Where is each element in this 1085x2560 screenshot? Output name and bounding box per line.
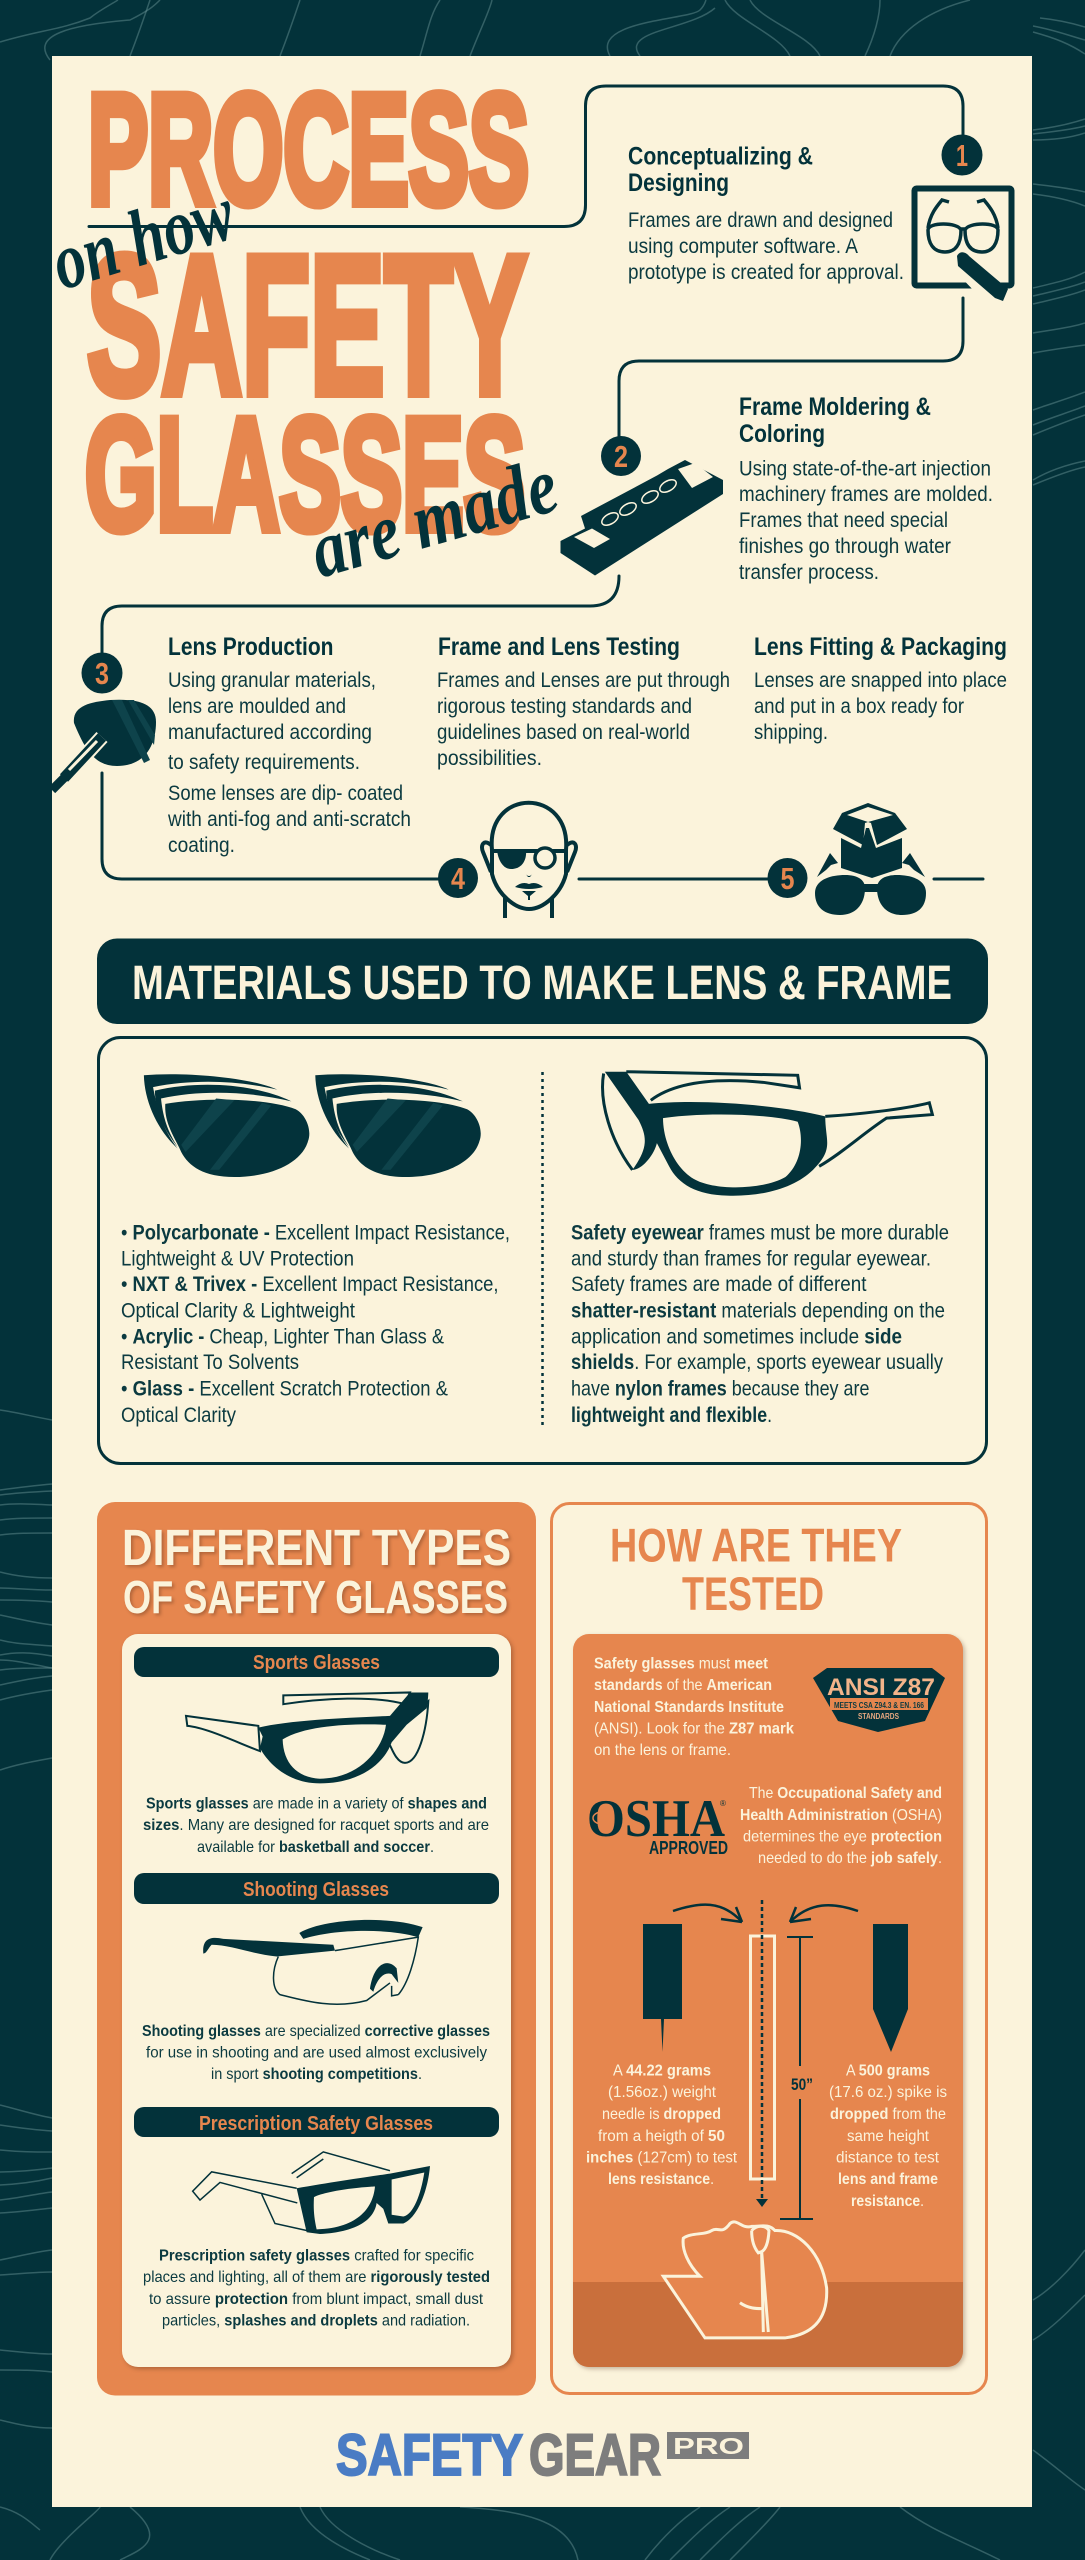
step 1 number — [942, 134, 982, 176]
logo: safety gear pro: GEAR — [529, 2423, 661, 2488]
step 3 body: manufactured according — [168, 721, 372, 744]
panel heading: OF SAFETY GLASSES — [123, 1571, 508, 1623]
prescription glasses text: particles, splashes and droplets and radiation. — [162, 2313, 470, 2330]
script: are made: are made — [301, 441, 567, 595]
shooting glasses text: in sport shooting competitions. — [211, 2066, 422, 2083]
ANSI text: standards of the American — [594, 1677, 772, 1694]
step 2 heading — [739, 393, 931, 448]
icon: man wearing glasses — [482, 803, 576, 918]
title word: GLASSES: GLASSES — [85, 385, 525, 563]
frames description: have nylon frames because they are — [571, 1378, 870, 1401]
prescription safety glasses — [134, 2107, 499, 2330]
sports glasses: Sports Glasses — [253, 1652, 380, 1674]
step 2: frame moldering and coloring — [560, 393, 993, 584]
ANSI Z87 badge: STANDARDS — [858, 1712, 900, 1721]
frames description — [571, 1222, 949, 1427]
logo: safety gear pro: SAFETY — [336, 2423, 523, 2488]
step 5 body: shipping. — [754, 721, 828, 744]
panel: materials — [98, 1038, 986, 1464]
step 2 number: 2 — [614, 439, 628, 474]
step 5: lens fitting and packaging — [754, 633, 1007, 915]
arrow: right spike to lens — [790, 1905, 858, 1922]
materials list: • Glass - Excellent Scratch Protection & — [121, 1378, 448, 1401]
step 1 heading: Designing — [628, 169, 729, 197]
prescription glasses text: places and lighting, all of them are rigorously tested — [143, 2269, 490, 2286]
title word: PROCESS: PROCESS — [88, 63, 529, 237]
OSHA text: The Occupational Safety and — [749, 1785, 942, 1802]
materials list: Optical Clarity & Lightweight — [121, 1300, 355, 1322]
step 4 number — [438, 858, 478, 898]
OSHA text — [740, 1785, 942, 1867]
icon: sports glasses — [186, 1692, 428, 1783]
panel: different types of safety glasses — [97, 1502, 536, 2396]
step 2 heading: Frame Moldering & — [739, 393, 931, 421]
needle test text: from a heigth of 50 — [598, 2128, 725, 2145]
icon: injection molding machine — [560, 460, 723, 576]
icon: spike weight — [873, 1924, 908, 2052]
spike test text: A 500 grams — [846, 2063, 930, 2080]
icon: box and sunglasses — [815, 803, 926, 915]
step 2 body: finishes go through water — [739, 535, 951, 558]
step 2 body: Using state-of-the-art injection — [739, 458, 991, 480]
step 3 number — [82, 652, 122, 694]
frames description: application and sometimes include side — [571, 1326, 902, 1349]
OSHA text: determines the eye protection — [743, 1828, 942, 1846]
sports glasses text: available for basketball and soccer. — [197, 1839, 434, 1856]
step 5 number — [768, 858, 808, 898]
step 1 body: using computer software. A — [628, 235, 858, 258]
frames description: lightweight and flexible. — [571, 1404, 772, 1427]
step 4 heading: Frame and Lens Testing — [438, 633, 680, 661]
step 1 body — [628, 209, 904, 284]
step 5 number: 5 — [780, 861, 794, 896]
icon: safety glasses frame — [603, 1072, 932, 1196]
step 3 body: Some lenses are dip- coated — [168, 782, 403, 805]
step 4 number: 4 — [451, 861, 466, 896]
icon: glasses on drawing board with pen — [914, 188, 1012, 304]
shooting glasses text: for use in shooting and are used almost exclusively — [146, 2044, 487, 2062]
spike test text: same height — [847, 2128, 930, 2145]
materials list: Optical Clarity — [121, 1404, 236, 1427]
script: on how: on how — [42, 169, 245, 307]
step 4 body: possibilities. — [437, 747, 542, 770]
step 2 body — [739, 458, 993, 584]
ANSI text: on the lens or frame. — [594, 1742, 731, 1759]
banner: materials used to make lens and frame — [97, 938, 988, 1024]
spike test text — [829, 2063, 947, 2210]
materials list — [121, 1222, 510, 1427]
OSHA approved logo: OSHA — [587, 1790, 725, 1848]
step 1 number: 1 — [956, 138, 968, 173]
panel heading: HOW ARE THEY — [610, 1519, 902, 1572]
OSHA text: Health Administration (OSHA) — [740, 1807, 942, 1824]
ANSI text: (ANSI). Look for the Z87 mark — [594, 1720, 794, 1738]
icon: needle weight — [643, 1924, 682, 2052]
ANSI text: National Standards Institute — [594, 1699, 784, 1716]
icon: stacked lenses — [144, 1074, 481, 1177]
OSHA approved logo: ® — [720, 1799, 726, 1808]
materials list: Resistant To Solvents — [121, 1351, 299, 1374]
step 3 body — [167, 669, 411, 857]
step 2 heading: Coloring — [739, 420, 825, 448]
step 5 heading: Lens Fitting & Packaging — [754, 633, 1007, 661]
logo: safety gear pro: PRO — [673, 2433, 744, 2459]
step 2 body: Frames that need special — [739, 509, 948, 532]
height label: 50” — [791, 2075, 813, 2094]
needle test text: A 44.22 grams — [613, 2063, 711, 2080]
process connector line — [89, 86, 983, 879]
frames description: Safety frames are made of different — [571, 1273, 867, 1296]
panel heading: TESTED — [682, 1567, 824, 1620]
panel heading — [122, 1519, 511, 1623]
step 3 body: to safety requirements. — [168, 751, 360, 774]
ANSI Z87 badge: MEETS CSA Z94.3 & EN. 166 — [834, 1700, 924, 1710]
materials list: • Polycarbonate - Excellent Impact Resistance, — [121, 1222, 510, 1245]
step 2 body: transfer process. — [739, 561, 879, 584]
needle test text — [586, 2063, 738, 2188]
icon: head wearing glasses — [663, 2222, 827, 2338]
step 1 heading: Conceptualizing & — [628, 142, 813, 170]
shooting glasses — [134, 1873, 499, 2083]
needle test text: inches (127cm) to test — [586, 2150, 738, 2166]
step 1: conceptualizing and designing — [628, 134, 1012, 304]
spike test text: lens and frame — [838, 2171, 938, 2188]
sports glasses — [134, 1647, 499, 1856]
shooting glasses text — [142, 2023, 490, 2083]
icon: prescription glasses — [193, 2152, 430, 2234]
prescription glasses text — [143, 2248, 490, 2330]
frames description: shatter-resistant materials depending on the — [571, 1300, 945, 1322]
step 2 number — [601, 436, 641, 476]
step 1 body: Frames are drawn and designed — [628, 209, 893, 232]
OSHA text: needed to do the job safely. — [758, 1850, 942, 1867]
shooting glasses text: Shooting glasses are specialized corrective glasses — [142, 2023, 490, 2040]
needle test text: lens resistance. — [608, 2171, 714, 2188]
sports glasses text — [143, 1796, 489, 1856]
step 3 heading: Lens Production — [168, 633, 334, 661]
step 3 body: with anti-fog and anti-scratch — [167, 808, 411, 831]
ANSI text: Safety glasses must meet — [594, 1655, 769, 1672]
frames description: Safety eyewear frames must be more durable — [571, 1222, 949, 1245]
ANSI Z87 badge — [813, 1668, 945, 1732]
step 3 body: lens are moulded and — [168, 695, 346, 718]
materials list: • NXT & Trivex - Excellent Impact Resistance, — [121, 1273, 498, 1296]
needle test text: needle is dropped — [602, 2106, 721, 2123]
title: process on how safety glasses are made — [85, 63, 529, 563]
step 1 body: prototype is created for approval. — [628, 261, 904, 284]
spike test text: (17.6 oz.) spike is — [829, 2084, 947, 2101]
prescription safety glasses: Prescription Safety Glasses — [199, 2113, 433, 2135]
step 3 body: coating. — [168, 834, 235, 857]
icon: lens held by tongs — [52, 700, 156, 790]
panel heading: DIFFERENT TYPES — [122, 1519, 511, 1576]
prescription glasses text: Prescription safety glasses crafted for specific — [159, 2248, 474, 2264]
OSHA approved logo: APPROVED — [649, 1838, 728, 1858]
logo: safety gear pro — [336, 2423, 749, 2488]
prescription glasses text: to assure protection from blunt impact, small dust — [149, 2291, 484, 2308]
step 3 body: Using granular materials, — [168, 669, 376, 692]
icon: shooting glasses — [203, 1920, 423, 2004]
spike test text: resistance. — [851, 2193, 924, 2210]
step 5 body: and put in a box ready for — [754, 695, 964, 718]
title word: SAFETY: SAFETY — [87, 215, 527, 435]
frames description: shields. For example, sports eyewear usually — [571, 1351, 943, 1374]
step 4 body: Frames and Lenses are put through — [437, 669, 730, 692]
arrow: left weight to lens — [673, 1905, 742, 1922]
materials list: • Acrylic - Cheap, Lighter Than Glass & — [121, 1326, 444, 1349]
step 4 body — [437, 669, 730, 770]
materials list: Lightweight & UV Protection — [121, 1248, 354, 1271]
step 4 body: guidelines based on real-world — [437, 721, 690, 744]
sports glasses text: sizes. Many are designed for racquet sports and are — [143, 1817, 489, 1834]
step 3: lens production — [52, 633, 411, 857]
step 4: frame and lens testing — [437, 633, 730, 918]
step 2 body: machinery frames are molded. — [739, 483, 993, 506]
spike test text: distance to test — [836, 2150, 940, 2166]
panel heading — [610, 1519, 902, 1620]
step 4 body: rigorous testing standards and — [437, 695, 692, 718]
ANSI Z87 badge: ANSI Z87 — [827, 1674, 935, 1701]
needle test text: (1.56oz.) weight — [608, 2084, 717, 2101]
frames description: and sturdy than frames for regular eyewear. — [571, 1248, 931, 1271]
sports glasses text: Sports glasses are made in a variety of shapes and — [146, 1796, 487, 1813]
step 5 body: Lenses are snapped into place — [754, 669, 1007, 692]
ANSI text — [594, 1655, 794, 1759]
step 5 body — [754, 669, 1007, 744]
panel: how are they tested — [552, 1504, 986, 2394]
spike test text: dropped from the — [830, 2106, 946, 2123]
lens drop test diagram — [750, 1900, 813, 2219]
shooting glasses: Shooting Glasses — [243, 1879, 389, 1901]
step 3 number: 3 — [95, 656, 109, 691]
step 1 heading — [628, 142, 813, 197]
